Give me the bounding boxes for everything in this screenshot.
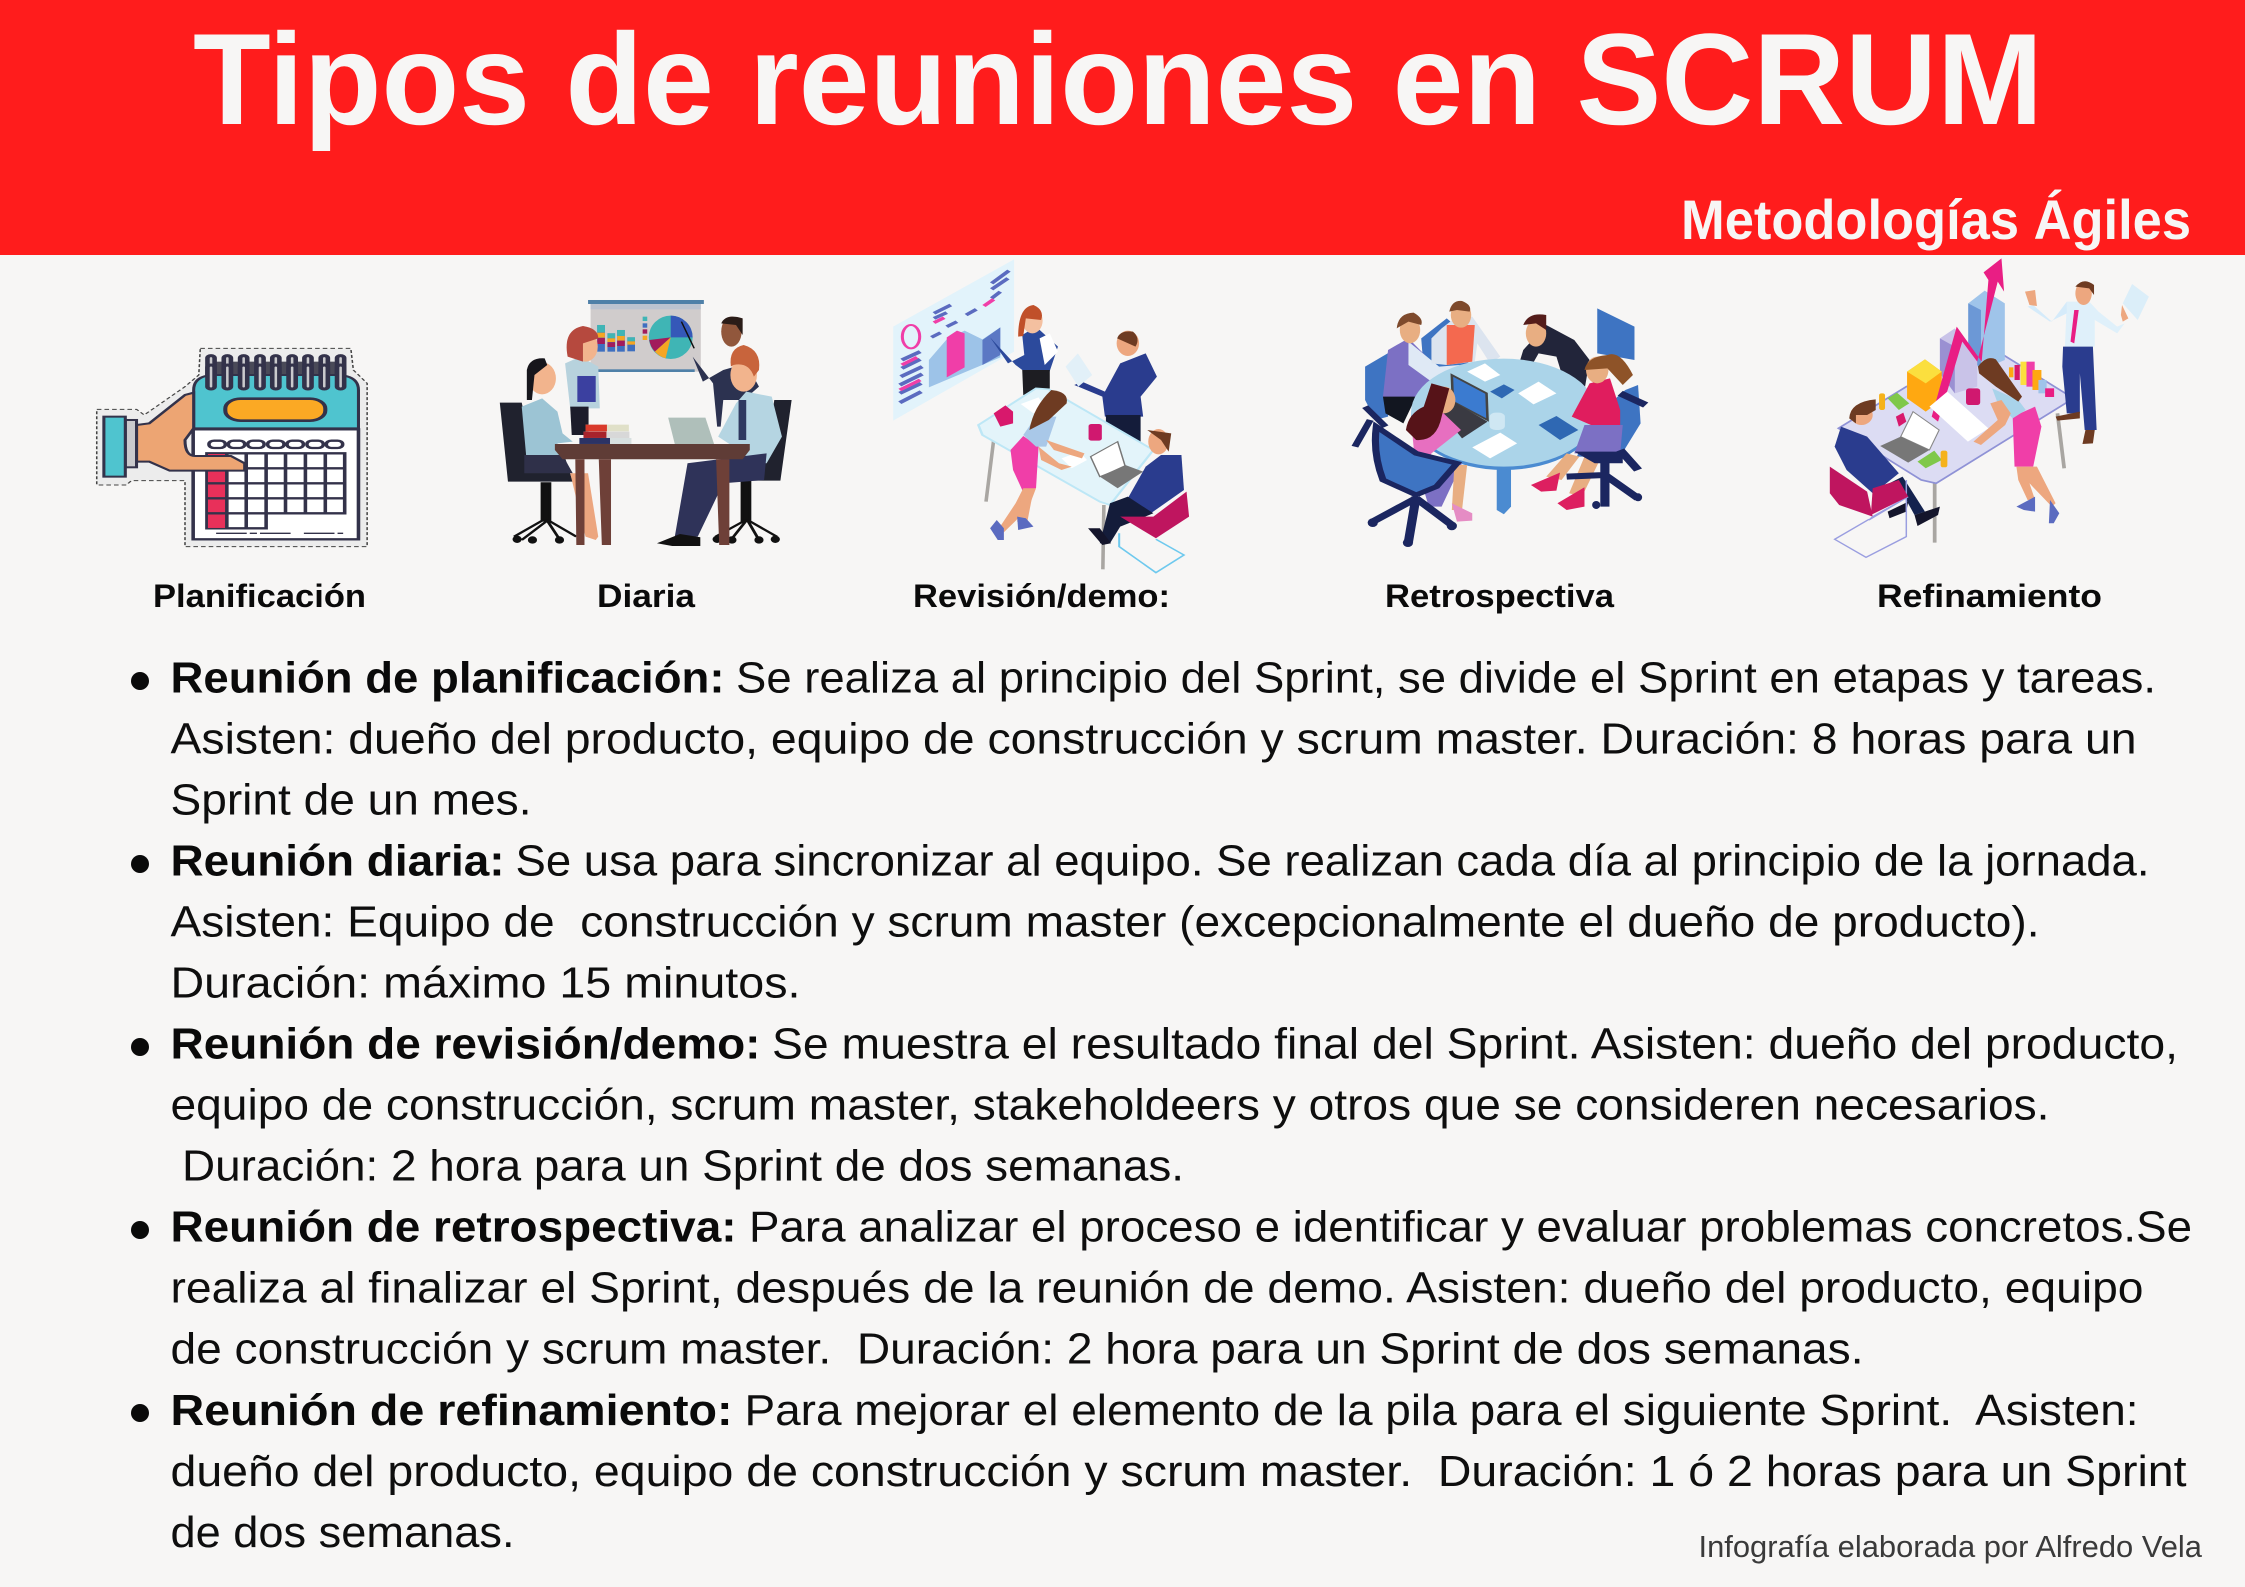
text block: retrospective meeting: de construcción y scrum master. Duración: 2 hora para un Sprint de dos semanas. bbox=[170, 1324, 1864, 1374]
presentation board bbox=[588, 300, 704, 372]
icon: review and demo meeting bbox=[893, 259, 1189, 573]
text block: review meeting: Duración: 2 hora para un Sprint de dos semanas. bbox=[182, 1142, 1184, 1190]
woman leaning bbox=[990, 390, 1084, 540]
text block: review meeting: equipo de construcción, scrum master, stakeholdeers y otros que se consideren necesarios. bbox=[170, 1080, 2050, 1130]
text block: review meeting: Reunión de revisión/demo: bbox=[170, 1020, 760, 1068]
small chart bbox=[2009, 362, 2054, 397]
text block: daily meeting bbox=[131, 836, 2150, 1008]
standing man bbox=[2025, 281, 2149, 444]
table bbox=[1411, 359, 1597, 514]
title: Tipos de reuniones en SCRUM bbox=[193, 6, 2043, 152]
table bbox=[978, 388, 1153, 569]
text block: refinement meeting bbox=[131, 1386, 2186, 1557]
icon: hand holding calendar bbox=[97, 348, 367, 547]
text block: refinement meeting: Para mejorar el elemento de la pila para el siguiente Sprint. Asisten: bbox=[744, 1386, 2138, 1435]
text block: retrospective meeting: Para analizar el proceso e identificar y evaluar problemas concretos.Se bbox=[749, 1202, 2192, 1252]
man dark suit bbox=[1513, 314, 1590, 390]
text block: retrospective meeting: Reunión de retrospectiva: bbox=[170, 1202, 737, 1252]
laptop bbox=[668, 418, 714, 444]
text block: planning meeting: Reunión de planificación: bbox=[170, 654, 724, 702]
icon: refinement meeting bbox=[1830, 258, 2149, 557]
back chairs bbox=[1365, 308, 1641, 457]
label: Planificación: Planificación bbox=[153, 578, 366, 614]
text block: daily meeting: Duración: máximo 15 minutos. bbox=[170, 958, 801, 1008]
woman standing bbox=[565, 357, 600, 408]
text block: retrospective meeting: realiza al finalizar el Sprint, después de la reunión de demo. Asisten: dueño del producto, equipo bbox=[170, 1264, 2144, 1312]
bar blocks and arrow bbox=[1907, 258, 2005, 422]
seated man and chair bbox=[1830, 399, 1940, 557]
money and papers bbox=[1879, 388, 1988, 468]
label: Revisión/demo: Revisión/demo: bbox=[913, 578, 1170, 614]
man seated bbox=[718, 392, 782, 463]
text block: daily meeting: Reunión diaria: bbox=[170, 836, 504, 886]
man standing bbox=[1066, 331, 1157, 443]
text block: refinement meeting: dueño del producto, equipo de construcción y scrum master. Duración: 1 ó 2 horas para un Sprint bbox=[170, 1447, 2186, 1496]
seated man and chair bbox=[1088, 429, 1189, 573]
books bbox=[586, 425, 629, 431]
text block: retrospective meeting bbox=[131, 1202, 2192, 1374]
icon: retrospective round table bbox=[1355, 301, 1646, 547]
table bbox=[555, 444, 750, 459]
text block: planning meeting: Sprint de un mes. bbox=[170, 776, 532, 824]
header banner bbox=[0, 0, 2245, 255]
subtitle: Metodologías Ágiles bbox=[1681, 188, 2191, 251]
text block: refinement meeting: Reunión de refinamiento: bbox=[170, 1386, 732, 1435]
text block: daily meeting: Se usa para sincronizar al equipo. Se realizan cada día al principio de la jornada. bbox=[516, 836, 2150, 886]
text block: daily meeting: Asisten: Equipo de construcción y scrum master (excepcionalmente el dueño de producto). bbox=[170, 898, 2040, 946]
woman back bbox=[1431, 301, 1500, 365]
icon: daily meeting bbox=[500, 300, 792, 546]
front chairs bbox=[1355, 393, 1646, 547]
text block: review meeting: Se muestra el resultado final del Sprint. Asisten: dueño del producto, bbox=[772, 1020, 2178, 1068]
table bbox=[1838, 355, 2074, 543]
wall dashboard bbox=[893, 259, 1014, 421]
text block: planning meeting: Se realiza al principio del Sprint, se divide el Sprint en etapas y tareas. bbox=[736, 654, 2156, 702]
footer credit: Infografía elaborada por Alfredo Vela bbox=[1698, 1529, 2203, 1564]
presenter bbox=[990, 305, 1058, 395]
woman seated bbox=[522, 398, 573, 463]
label: Diaria: Diaria bbox=[597, 578, 695, 614]
man left bbox=[1383, 313, 1462, 423]
woman right bbox=[1531, 354, 1633, 510]
text block: planning meeting: Asisten: dueño del producto, equipo de construcción y scrum master. Duración: 8 horas para un bbox=[170, 714, 2136, 764]
text block: review meeting bbox=[131, 1020, 2178, 1190]
text block: planning meeting bbox=[131, 654, 2156, 824]
chairs bbox=[500, 403, 573, 482]
label: Retrospectiva: Retrospectiva bbox=[1385, 578, 1614, 614]
woman leaning bbox=[1973, 358, 2059, 523]
man with pointer bbox=[693, 357, 759, 427]
label: Refinamiento: Refinamiento bbox=[1877, 578, 2102, 614]
text block: refinement meeting: de dos semanas. bbox=[170, 1508, 514, 1557]
woman front bbox=[1406, 383, 1472, 522]
